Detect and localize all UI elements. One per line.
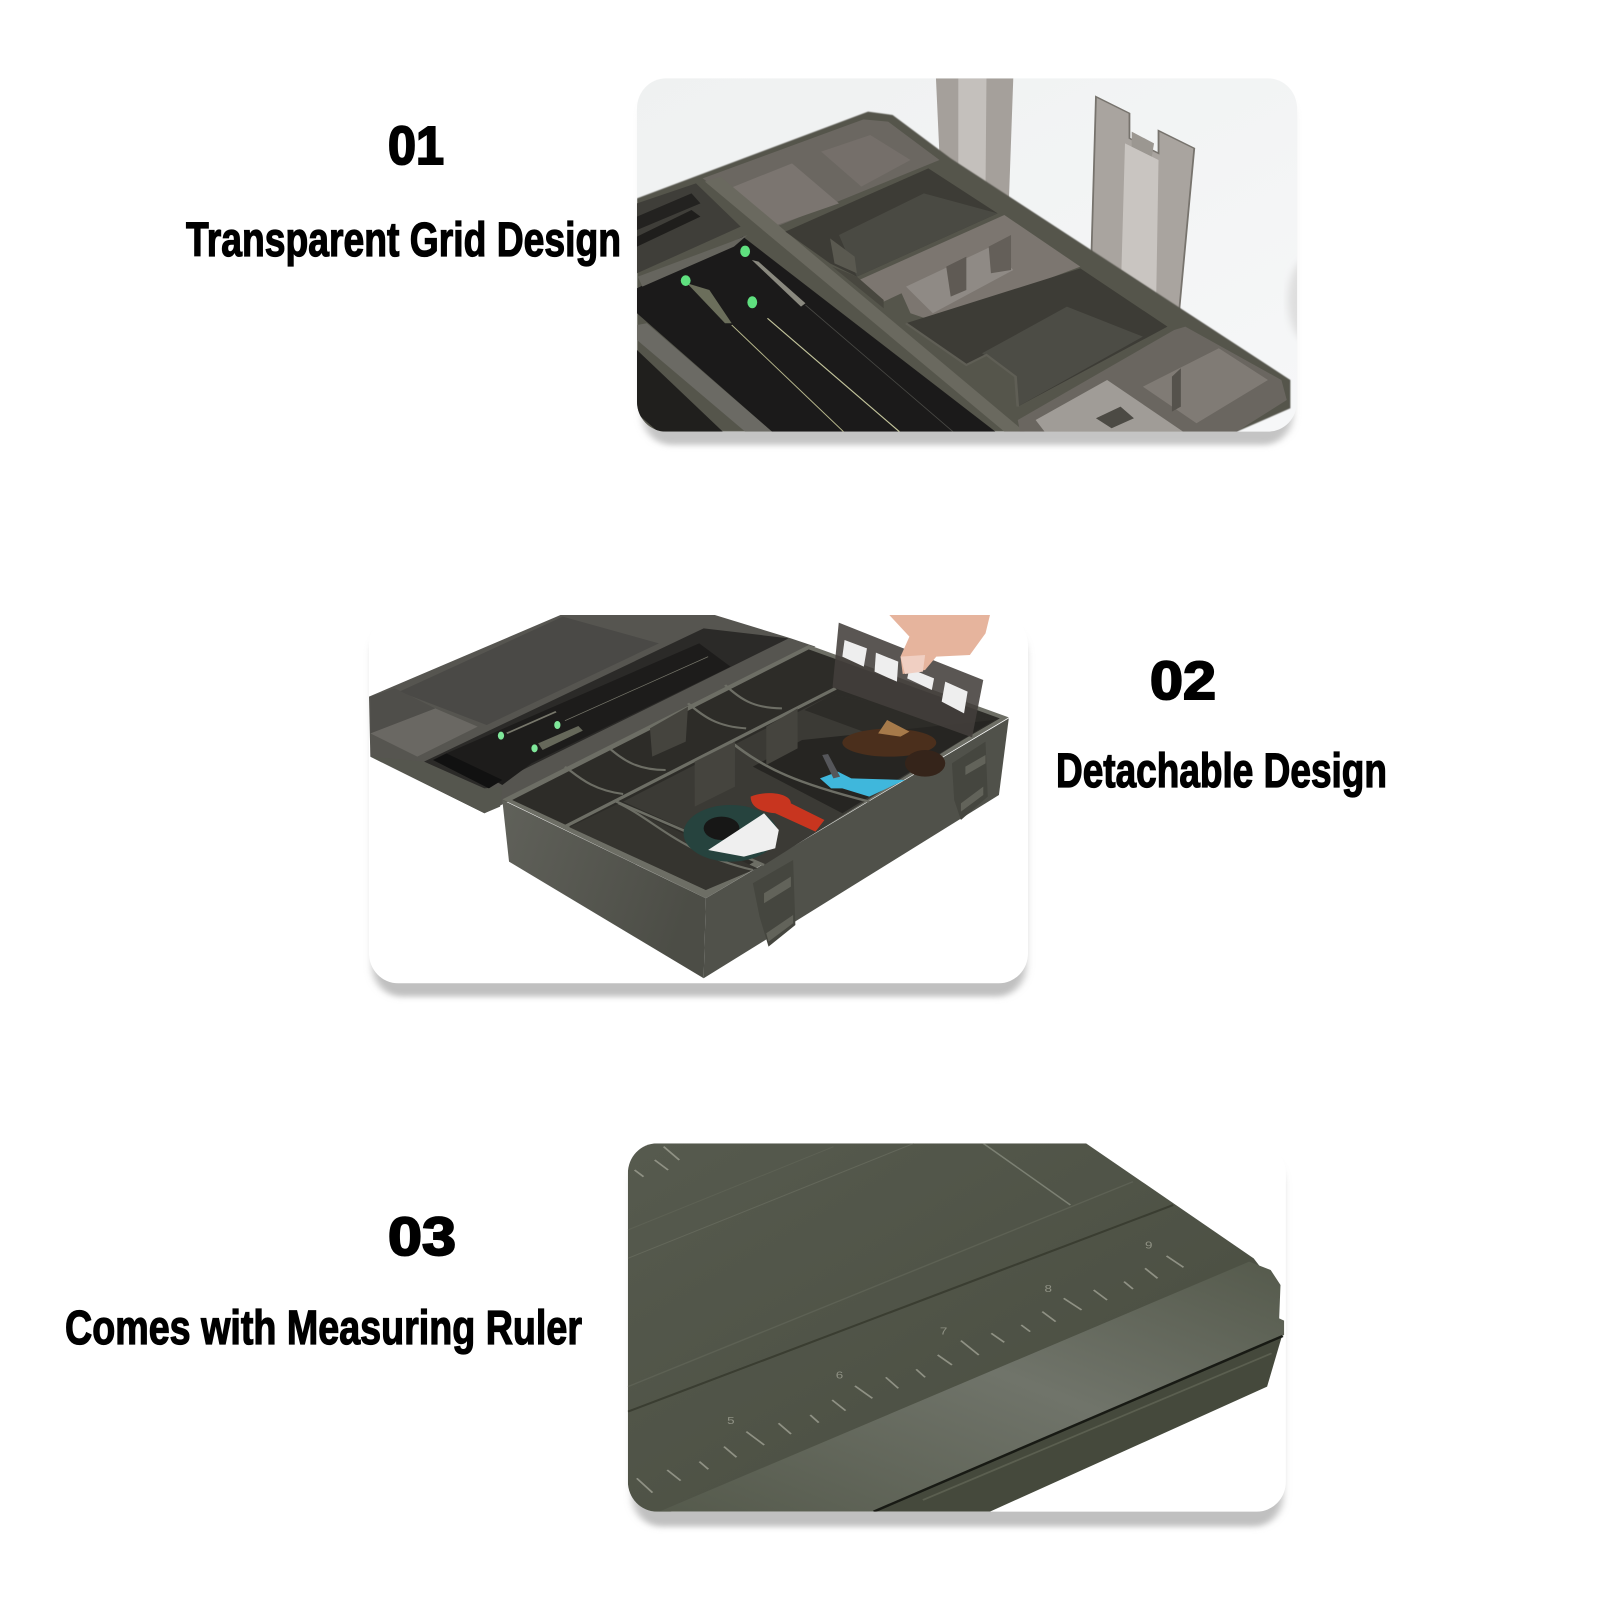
latch front (753, 860, 795, 947)
ruler numbers (727, 1239, 1153, 1427)
moulded lines (628, 1143, 1173, 1412)
spool with white disc (684, 805, 779, 862)
brown lure (842, 720, 945, 777)
heading: Transparent Grid Design: Transparent Grid Design (186, 214, 621, 267)
standing divider left (936, 78, 1013, 203)
box rim and interior (502, 645, 1009, 898)
removable grid divider (832, 623, 983, 737)
ruler ticks (635, 1147, 1184, 1493)
heading: Comes with Measuring Ruler: Comes with Measuring Ruler (65, 1302, 582, 1355)
panel: measuring ruler photo (628, 1143, 1286, 1527)
foam clamp bar (638, 235, 747, 287)
standing divider right (1091, 97, 1194, 317)
black foam (637, 237, 995, 432)
latch right (952, 742, 988, 820)
lower side of box (874, 1333, 1283, 1512)
translucent lid compartment top (703, 119, 940, 227)
chamfered highlight edge (659, 1262, 1284, 1512)
ruler numbers: 8 (1044, 1283, 1052, 1295)
comb rack (637, 183, 741, 273)
blue scissors (820, 754, 905, 797)
ruler numbers: 7 (940, 1325, 947, 1337)
hand (889, 615, 990, 674)
box top surface (628, 1143, 1263, 1517)
panel: transparent grid photo (637, 78, 1333, 445)
red clip (751, 793, 824, 832)
ruler numbers: 5 (727, 1415, 735, 1427)
box outer faces (502, 718, 1009, 978)
open lid (369, 615, 815, 813)
panel: detachable design photo (369, 615, 1028, 997)
hinge strip (637, 323, 772, 432)
ruler numbers: 6 (836, 1369, 844, 1381)
rail (705, 177, 1024, 432)
number 02: 02 (1150, 651, 1216, 711)
empty compartment 2 (906, 268, 1167, 407)
translucent compartment bottom right (1018, 327, 1287, 432)
number 01: 01 (388, 116, 444, 176)
ruler numbers: 9 (1145, 1239, 1153, 1251)
heading: Detachable Design: Detachable Design (1056, 745, 1387, 798)
translucent divider tray (832, 215, 1080, 322)
box top view (637, 112, 1290, 432)
fishing rigs (681, 246, 953, 432)
empty compartment 1 (785, 168, 998, 277)
number 03: 03 (388, 1207, 456, 1267)
